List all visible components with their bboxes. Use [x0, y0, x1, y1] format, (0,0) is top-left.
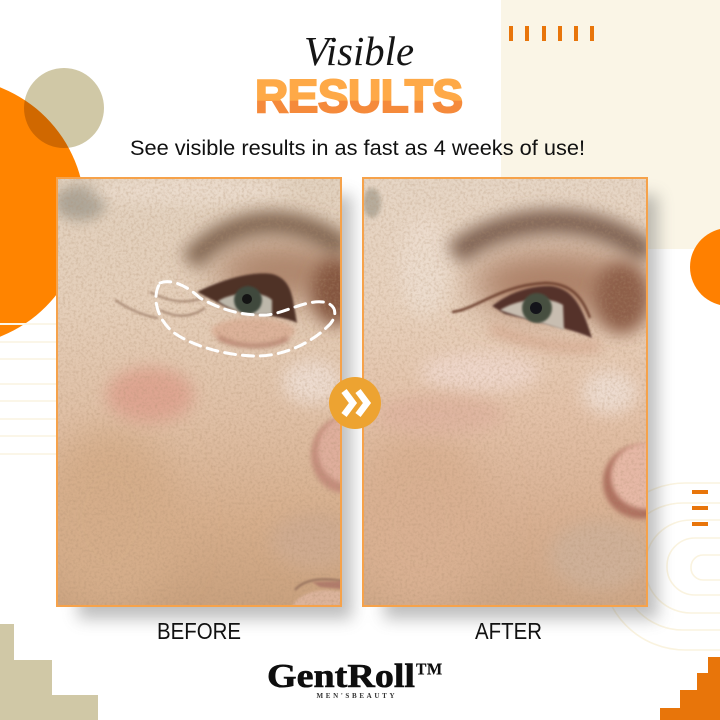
tan stepped shape bottom left	[0, 624, 98, 720]
cheek tone	[386, 393, 496, 424]
eye socket shadow	[213, 242, 357, 302]
stubble	[556, 536, 644, 589]
brand logo	[267, 658, 443, 700]
lower-left tan tone	[58, 424, 163, 597]
orange tick marks right	[692, 490, 708, 526]
cheek highlight	[582, 370, 638, 414]
label: before: BEFORE	[157, 618, 241, 644]
title: Visible: Visible	[304, 28, 414, 74]
forehead highlight	[89, 179, 277, 203]
skin texture	[58, 179, 340, 605]
orange stepped shape bottom right	[660, 657, 720, 720]
panel shadows	[78, 195, 658, 619]
eyebrow	[455, 221, 648, 255]
smooth under-eye highlight	[420, 352, 540, 392]
title: RESULTS: RESULTS	[255, 70, 464, 122]
concentric cream contour lines right	[602, 483, 720, 650]
cream panel top right	[501, 0, 720, 249]
lid crease	[452, 283, 590, 318]
wrinkles	[115, 292, 205, 318]
outer corner shadow	[594, 262, 650, 334]
orange circle right	[690, 228, 720, 306]
orange tick marks top right	[509, 26, 594, 41]
icon: double chevron	[344, 391, 367, 415]
lower-left tan tone	[378, 438, 464, 596]
dashed outline around under-eye area	[156, 282, 335, 356]
arrow badge	[329, 377, 381, 429]
eye	[492, 286, 592, 338]
label: after: AFTER	[475, 618, 542, 644]
eye	[197, 273, 297, 323]
hair patch	[363, 188, 381, 218]
panel: before photo	[56, 177, 342, 607]
lip	[292, 590, 342, 606]
brand name: GentRoll	[267, 658, 415, 695]
stubble	[288, 546, 340, 562]
orange circle left	[0, 78, 85, 346]
lower lid shading	[490, 328, 600, 347]
eye socket shadow	[470, 250, 640, 316]
under-eye bag	[211, 318, 295, 344]
eyebrow	[190, 223, 345, 262]
skin texture	[364, 179, 646, 605]
red blotch	[106, 367, 194, 423]
trademark: ™	[415, 658, 443, 689]
panel: after photo	[362, 177, 648, 607]
hair patch	[54, 185, 106, 221]
nose	[600, 442, 646, 522]
tan circle overlapping orange circle	[24, 68, 104, 148]
outer corner shadow	[311, 258, 359, 326]
inner brow highlight	[402, 225, 452, 313]
cream horizontal lines left	[0, 323, 56, 455]
cheek highlight	[282, 360, 342, 404]
nose	[309, 417, 340, 494]
subtitle: See visible results in as fast as 4 weeks of use!	[130, 137, 585, 160]
brand tagline: MEN'SBEAUTY	[316, 692, 394, 700]
